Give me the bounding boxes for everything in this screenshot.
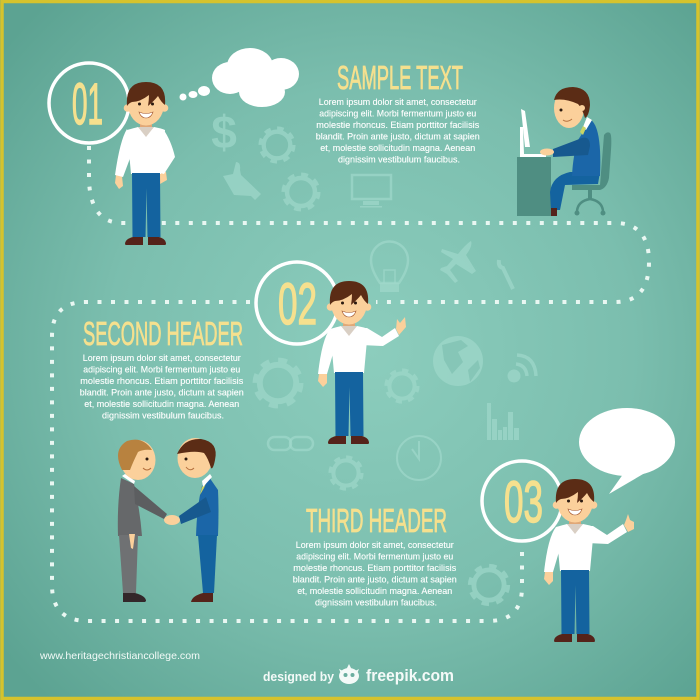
head — [554, 88, 584, 128]
body text 1: blandit. Proin ante justo, dictum at sapien — [316, 132, 480, 142]
heading: sample text: SAMPLE TEXT — [337, 59, 463, 96]
body text 3: molestie rhoncus. Etiam porttitor facilisis — [293, 563, 457, 573]
body text 1: adipiscing elit. Morbi fermentum justo eu — [319, 108, 476, 118]
speech bubble — [579, 408, 675, 494]
body text 2: Lorem ipsum dolor sit amet, consectetur — [83, 353, 241, 363]
icon: light bulb — [371, 242, 408, 292]
icon: gear 1 — [260, 128, 294, 162]
step 02 number circle — [256, 262, 338, 344]
icon: monitor — [352, 175, 391, 208]
body text 2: blandit. Proin ante justo, dictum at sapien — [80, 388, 244, 398]
body text 2: molestie rhoncus. Etiam porttitor facilisis — [80, 376, 244, 386]
body text 3: Lorem ipsum dolor sit amet, consectetur — [296, 540, 454, 550]
icon: gear 2 — [283, 174, 319, 210]
body text 2: dignissim vestibulum faucibus. — [102, 410, 224, 420]
icon: clock — [397, 436, 441, 480]
body text 3: et, molestie sollicitudin magna. Aenean — [297, 586, 452, 596]
legs — [550, 172, 600, 210]
body text 1: et, molestie sollicitudin magna. Aenean — [320, 143, 475, 153]
icon: wrench — [499, 260, 513, 289]
icon: dollar: $ — [211, 106, 237, 158]
step 01 number circle: 01 — [72, 72, 103, 137]
icon: airplane — [440, 241, 476, 283]
body text 2: adipiscing elit. Morbi fermentum justo eu — [83, 364, 240, 374]
footer credit — [263, 664, 454, 685]
thought cloud — [180, 48, 299, 107]
clasped hands — [164, 515, 180, 525]
person 1: white sweater, hand on hip — [115, 82, 175, 245]
icon: gear 4 — [386, 370, 418, 402]
background icons — [211, 106, 536, 604]
blue suit man — [177, 438, 218, 602]
step 03 number circle — [482, 461, 562, 541]
body text 2: et, molestie sollicitudin magna. Aenean — [84, 399, 239, 409]
watermark url: www.heritagechristiancollege.com — [39, 650, 200, 662]
icon: bar chart — [487, 403, 519, 440]
step 01 number circle — [49, 63, 129, 143]
icon: thumbs up — [223, 162, 261, 200]
icon: freepik mascot — [339, 664, 359, 684]
body text 3: dignissim vestibulum faucibus. — [315, 598, 437, 608]
freepik wordmark: freepik.com — [366, 667, 454, 685]
icon: wifi — [508, 355, 536, 382]
person 2: pointing arm raised — [318, 281, 406, 444]
person 3: thumbs up — [544, 479, 634, 642]
heading: third header: THIRD HEADER — [306, 502, 447, 539]
handshake pair — [118, 438, 218, 602]
torso — [572, 120, 600, 176]
person at desk — [517, 87, 611, 216]
body text 1: molestie rhoncus. Etiam porttitor facilisis — [316, 120, 480, 130]
icon: chain link — [268, 437, 313, 450]
icon: globe — [433, 336, 483, 386]
arm — [553, 138, 590, 157]
step 03 number circle: 03 — [504, 470, 543, 535]
body text 3: adipiscing elit. Morbi fermentum justo eu — [296, 552, 453, 562]
monitor and keyboard — [520, 109, 546, 157]
body text 1: Lorem ipsum dolor sit amet, consectetur — [319, 97, 477, 107]
icon: gear 6 — [470, 566, 508, 604]
desk — [517, 157, 551, 216]
body text 3: blandit. Proin ante justo, dictum at sapien — [293, 574, 457, 584]
grey suit man — [118, 440, 167, 602]
office chair — [572, 132, 611, 216]
icon: gear 5 — [330, 457, 362, 489]
dotted route line — [52, 146, 649, 621]
credit label: designed by — [263, 670, 334, 684]
body text 1: dignissim vestibulum faucibus. — [338, 154, 460, 164]
heading: second header: SECOND HEADER — [83, 315, 243, 352]
icon: gear 3 — [255, 360, 301, 406]
step 02 number circle: 02 — [278, 272, 317, 337]
